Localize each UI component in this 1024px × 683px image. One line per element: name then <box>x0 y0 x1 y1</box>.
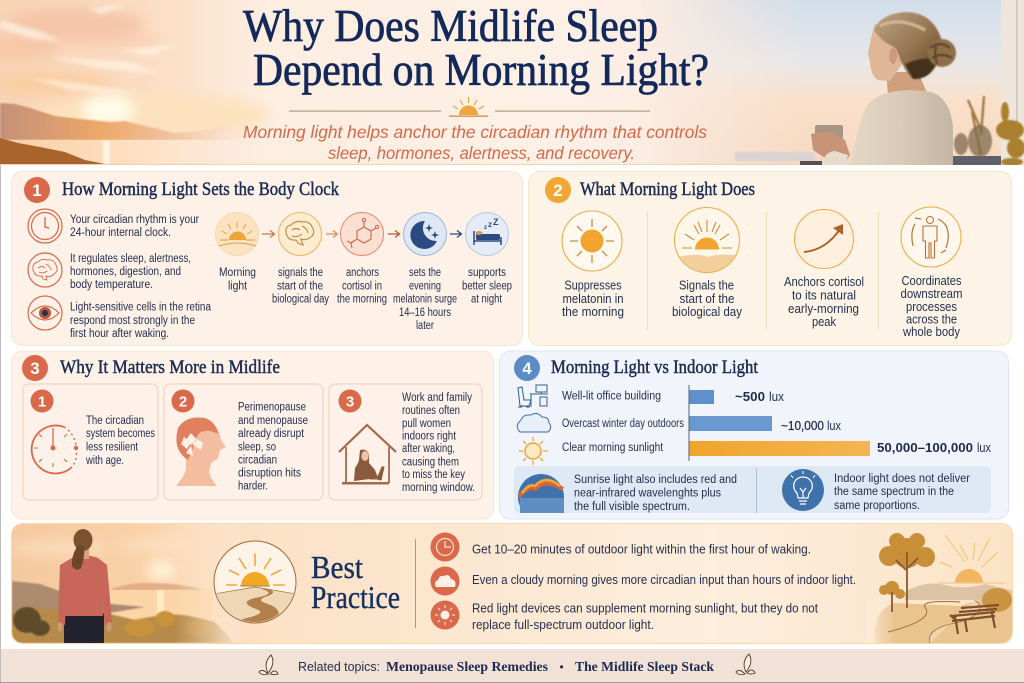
mountains <box>0 102 220 140</box>
text: sunrise: the full visible spectrum. <box>574 501 690 513</box>
flow step: morning light: Morning <box>219 267 256 279</box>
bar chart: 50,000–100,000 <box>877 440 973 455</box>
item: signals start of biological day: start of the <box>680 292 735 306</box>
flow step: melatonin surge: evening <box>409 280 441 292</box>
card: less resilient with age: less resilient <box>86 442 139 454</box>
badge 2 <box>545 177 571 203</box>
heading 4: Morning Light vs Indoor Light <box>551 358 759 378</box>
arrow <box>450 230 462 238</box>
hair <box>874 12 956 79</box>
card: routines indoors: morning window. <box>402 482 475 494</box>
item: signals start of biological day: Signals the <box>679 278 734 292</box>
icon: brain outline <box>28 253 62 287</box>
panel 4: morning light vs indoor light <box>500 351 1008 520</box>
item: coordinates downstream: downstream <box>900 287 962 301</box>
card: perimenopause: circadian <box>238 454 277 466</box>
icon: sunrise spectrum <box>518 474 564 513</box>
tip: red light <box>430 600 818 632</box>
figure <box>58 529 112 643</box>
panel 1: how morning light sets the body clock <box>12 172 522 346</box>
subtitle <box>243 122 707 163</box>
distant sea band <box>735 152 815 161</box>
flow step: melatonin surge: melatonin surge <box>393 294 457 306</box>
card: routines indoors: Work and family <box>402 392 472 404</box>
bar chart: lux <box>769 390 785 404</box>
item: anchors cortisol <box>784 210 864 329</box>
panel: best practice <box>10 524 1012 644</box>
sweater <box>850 90 953 165</box>
flow step: melatonin surge: later <box>416 320 434 332</box>
badge 1: 1 <box>32 181 42 200</box>
face <box>868 24 905 81</box>
icon: eye <box>28 296 62 330</box>
item: coordinates downstream: processes <box>906 300 957 314</box>
card: perimenopause: harder. <box>238 480 268 492</box>
flow step: signals start of day: biological day <box>272 294 329 306</box>
tip: clock <box>430 532 811 562</box>
panel 3: why it matters more in midlife <box>12 351 494 519</box>
text: retina <box>70 302 212 340</box>
illustration: tree, sun and bench <box>865 533 1012 643</box>
card: routines indoors: indoors right <box>402 430 457 442</box>
emblem: sun over winding path <box>214 541 296 625</box>
card: perimenopause: and menopause <box>238 415 308 427</box>
badge 3 <box>22 355 48 381</box>
badge 4: 4 <box>522 359 532 378</box>
flow step: better sleep: z <box>484 225 487 231</box>
item: anchors cortisol: peak <box>812 315 837 329</box>
flow step: signals start of day: signals the <box>278 267 323 279</box>
flow step: anchors cortisol: the morning <box>337 294 387 306</box>
item: suppresses melatonin: melatonin in <box>562 292 624 306</box>
tip: red light: Red light devices can supplement morning sunlight, but they do not <box>472 602 818 616</box>
item: coordinates downstream: whole body <box>902 325 961 339</box>
heading: best practice: Practice <box>311 579 400 615</box>
card: routines indoors: 3 <box>346 394 354 410</box>
heading: best practice: Best <box>311 549 363 585</box>
tip: clock: Get 10–20 minutes of outdoor light within the first hour of waking. <box>472 542 811 556</box>
badge 1 <box>24 177 50 203</box>
card: less resilient with age: 1 <box>38 394 46 410</box>
flow step: better sleep: better sleep <box>462 280 512 292</box>
photo: woman at sunrise lake <box>10 524 240 643</box>
heading 3: Why It Matters More in Midlife <box>60 358 280 378</box>
bar chart: lux <box>977 441 992 455</box>
flow step: morning light <box>216 212 258 292</box>
card: perimenopause: already disrupt <box>238 428 305 440</box>
item: coordinates downstream: across the <box>906 312 957 326</box>
text: regulates: hormones, digestion, and <box>70 266 181 278</box>
subtitle: Morning light helps anchor the circadian rhythm that controls <box>243 122 707 142</box>
title <box>243 1 709 95</box>
tip: red light: replace full-spectrum outdoor light. <box>472 618 654 632</box>
card: perimenopause: disruption hits <box>238 468 301 480</box>
text: indoor <box>834 473 970 512</box>
heading: best practice <box>311 549 400 615</box>
bar chart: ~10,000 <box>781 418 824 433</box>
item: suppresses melatonin <box>562 211 624 319</box>
flow step: better sleep: at night <box>471 294 503 306</box>
arrow <box>262 230 274 238</box>
sun divider <box>289 97 650 117</box>
item: signals start of biological day <box>672 208 743 319</box>
flow step: anchors cortisol <box>337 212 387 306</box>
neck <box>886 72 926 93</box>
panel 2: what morning light does <box>528 172 1012 346</box>
callout strip <box>514 466 991 513</box>
card: perimenopause: Perimenopause <box>238 402 306 414</box>
footer: related topics: The Midlife Sleep Stack <box>575 660 714 675</box>
card: routines indoors: to miss the key <box>402 469 465 481</box>
heading 2: What Morning Light Does <box>580 180 755 200</box>
mug and hand <box>815 125 843 139</box>
arrow <box>388 230 400 238</box>
text: regulates <box>70 253 191 291</box>
text: retina: first hour after waking. <box>70 328 169 340</box>
text: indoor: Indoor light does not deliver <box>834 473 970 485</box>
row label: sunlight: Clear morning sunlight <box>562 442 664 454</box>
flow step: signals start of day: start of the <box>277 280 323 292</box>
text: regulates: It regulates sleep, alertness, <box>70 253 191 265</box>
text: regulates: body temperature. <box>70 279 153 291</box>
icon: cloud <box>517 413 551 432</box>
item: suppresses melatonin: Suppresses <box>564 278 622 292</box>
icon: woman profile with flower <box>176 417 226 486</box>
item: signals start of biological day: biological day <box>672 305 743 319</box>
woman in sweater with mug <box>800 0 1024 166</box>
item: anchors cortisol: Anchors cortisol <box>784 275 864 289</box>
icon: sun <box>519 437 548 465</box>
badge 3: 3 <box>30 359 40 378</box>
flow step: anchors cortisol: cortisol in <box>342 280 382 292</box>
item: coordinates downstream: Coordinates <box>902 274 962 288</box>
flow step: better sleep: z <box>488 220 492 229</box>
card: less resilient with age: system becomes <box>86 428 155 440</box>
card: routines indoors: causing them <box>402 456 459 468</box>
flow step: signals start of day <box>272 212 329 306</box>
card: less resilient with age: with age. <box>85 455 124 467</box>
flow step: melatonin surge: 14–16 hours <box>399 307 451 319</box>
card: less resilient with age <box>23 384 158 500</box>
text: circadian rhythm: Your circadian rhythm is your <box>70 214 199 226</box>
flow step: better sleep: Z <box>493 217 499 227</box>
card: perimenopause <box>164 384 323 500</box>
card: routines indoors: routines often <box>402 405 460 417</box>
title: Depend on Morning Light? <box>253 45 709 95</box>
card: perimenopause: sleep, so <box>238 442 276 454</box>
badge 4 <box>514 355 540 381</box>
footer: related topics: Related topics: <box>298 660 380 674</box>
title: Why Does Midlife Sleep <box>243 1 658 51</box>
text: sunrise: near-infrared wavelenghts plus <box>574 488 721 500</box>
icon: leaves right <box>736 654 755 675</box>
item: anchors cortisol: to its natural <box>792 288 856 302</box>
badge 2: 2 <box>553 181 563 200</box>
card: routines indoors: pull women <box>402 418 451 430</box>
item: suppresses melatonin: the morning <box>562 305 624 319</box>
footer: related topics: Menopause Sleep Remedies <box>386 660 549 675</box>
arrow <box>326 230 338 238</box>
card: routines indoors <box>329 384 482 500</box>
text: retina: respond most strongly in the <box>70 315 195 327</box>
tip: cloud: Even a cloudy morning gives more circadian input than hours of indoor light. <box>472 573 856 587</box>
footer: related topics <box>0 649 1024 683</box>
footer: related topics: • <box>560 660 564 674</box>
icon: clock <box>28 209 62 243</box>
tip: cloud <box>430 566 856 596</box>
text: circadian rhythm: 24-hour internal clock. <box>70 227 171 239</box>
text: sunrise <box>574 474 737 513</box>
flow step: morning light: light <box>228 280 248 292</box>
text: retina: Light-sensitive cells in the retina <box>70 302 212 314</box>
icon: office desk <box>518 385 548 407</box>
card: perimenopause: 2 <box>179 394 187 410</box>
text: indoor: the same spectrum in the <box>834 486 954 498</box>
icon: clock dial <box>32 425 78 473</box>
heading 1: How Morning Light Sets the Body Clock <box>62 180 340 200</box>
icon: leaves left <box>259 655 278 675</box>
bar chart: ~500 <box>735 389 765 404</box>
text: circadian rhythm <box>70 214 199 239</box>
flow step: melatonin surge <box>393 212 457 332</box>
flow step: better sleep: supports <box>468 267 506 279</box>
row label: overcast: Overcast winter day outdoors <box>562 418 684 430</box>
card: less resilient with age: The circadian <box>86 415 144 427</box>
header banner <box>0 0 1024 166</box>
text: indoor: same proportions. <box>834 500 920 512</box>
text: sunrise: Sunrise light also includes red and <box>574 474 737 486</box>
card: routines indoors: after waking, <box>402 443 455 455</box>
subtitle: sleep, hormones, alertness, and recovery. <box>328 143 635 163</box>
item: anchors cortisol: early-morning <box>788 302 859 316</box>
flow step: anchors cortisol: anchors <box>346 267 379 279</box>
flow step: better sleep <box>462 212 512 306</box>
item: coordinates downstream <box>900 207 962 339</box>
icon: light bulb <box>782 469 824 511</box>
flow step: melatonin surge: sets the <box>409 267 441 279</box>
bar chart <box>688 385 992 461</box>
bar chart: lux <box>827 419 842 433</box>
icon: woman at laptop in house <box>339 425 396 484</box>
plants <box>954 96 1024 166</box>
row label: office: Well-lit office building <box>562 390 661 402</box>
